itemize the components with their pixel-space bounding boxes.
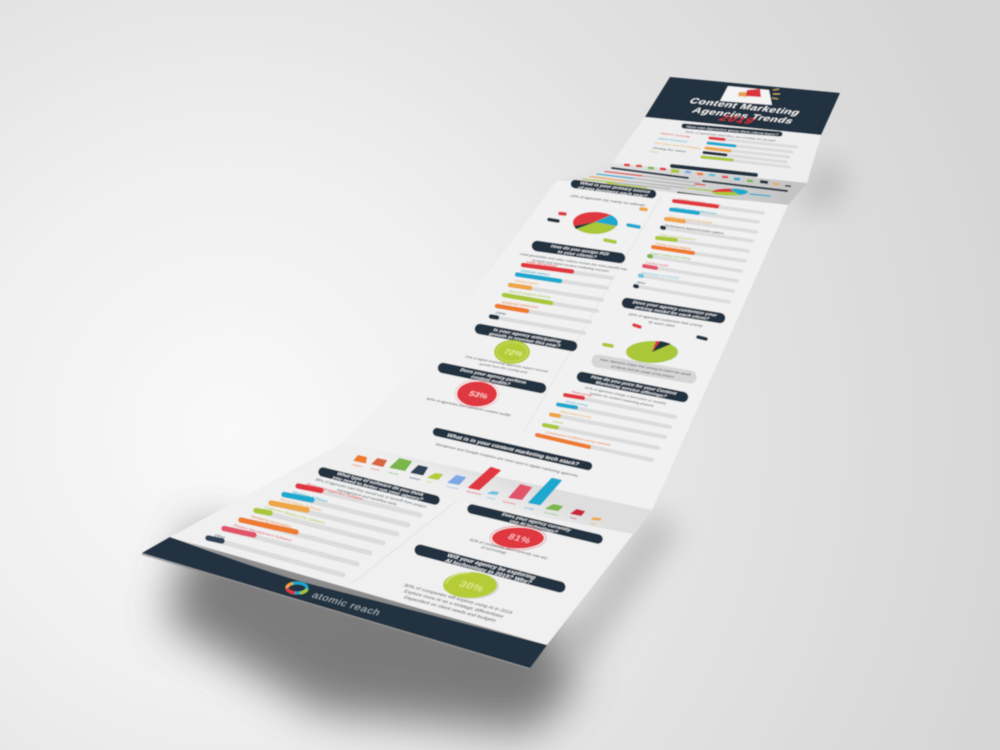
bar chart: Paid social and web display (667, 215, 714, 224)
panel: AI exploring (402, 550, 560, 623)
caption: 30% of companies will explore using AI in 2019 (402, 583, 514, 616)
bar labels: Marketo (408, 476, 422, 481)
bar chart: Finding the Talent (651, 147, 687, 153)
panel: bottom section (170, 443, 652, 645)
bar labels: Semrush (445, 485, 460, 490)
heading pill: Does your agency currently (500, 512, 572, 533)
bar chart: Social reach (513, 279, 539, 286)
panel: right column services chart (635, 198, 763, 302)
panel: tech stack (350, 432, 602, 526)
bar labels: Trello (568, 516, 578, 520)
panel: anticipating growth (464, 328, 572, 374)
panel: pie chart question (549, 181, 652, 242)
bar chart: Cost (648, 150, 659, 154)
pie labels (604, 325, 706, 346)
panel: price for services (537, 375, 683, 460)
caption: 43% of agencies rely mainly on referrals (569, 194, 647, 207)
divider (523, 195, 662, 433)
panel: main middle section (343, 180, 788, 510)
panel: content audits (425, 368, 541, 417)
caption: 84% of agencies don't perform content audits (425, 397, 512, 417)
panel: squeezed fold section (557, 163, 807, 205)
bar chart (491, 260, 612, 333)
heading pill: How can Agencies grow their client base? (685, 125, 780, 136)
bar chart: Combination of different pricing methods (544, 431, 611, 447)
bar chart: Video and infographics (658, 233, 697, 241)
bar chart: Expert writing and editing (649, 252, 692, 260)
bar chart: Client Retention (656, 137, 688, 143)
caption: management and workflow tools (335, 488, 398, 506)
bar chart: Other (635, 281, 648, 285)
caption: 72% of digital marketing agencies expect revenue (464, 355, 549, 373)
caption: Explore more AI as a strategic differentiator (402, 589, 505, 619)
bar chart: What's currently (659, 132, 692, 138)
caption: Wordpress and Google Analytics are most used in digital marketing agencies (434, 442, 580, 478)
caption: for each client (647, 320, 677, 328)
bar chart: Website visitors (519, 269, 552, 277)
bar chart: Hourly pricing (564, 400, 589, 407)
bar chart: Other (213, 533, 228, 540)
bar chart: Marketing Automation (249, 514, 294, 529)
heading pill (480, 328, 572, 349)
bar labels: Google (523, 506, 536, 511)
panel: footer (142, 537, 547, 669)
pie chart (573, 212, 618, 234)
heading pill (672, 166, 756, 175)
caption: 81% of companies don't currently use any (469, 538, 550, 560)
note pill: of clients and the scope of the project (610, 365, 675, 379)
heading pill (420, 550, 560, 587)
bar labels: Other (588, 522, 598, 526)
heading pill: you need to better run your agency? (331, 475, 424, 502)
heading pill: content audits? (469, 375, 511, 387)
stat circle 30%: 30% (456, 579, 487, 594)
icon: laptop and megaphone (720, 86, 780, 105)
heading pill: Does your agency perform (458, 368, 528, 385)
bar labels: Buzzsumo (543, 511, 560, 517)
heading pill: How do you price for your Content (589, 375, 678, 396)
caption: Dependent on client needs and budgets (402, 595, 498, 623)
bar chart: Project Management Software (305, 482, 365, 501)
heading pill: Marketing service offerings? (594, 381, 668, 399)
bar chart: Lead generation (525, 260, 559, 268)
bar chart: Revenue and Profitability (653, 142, 702, 150)
heading pill (537, 244, 620, 260)
stat circle 72%: 72% (502, 347, 526, 358)
sheet shadow (165, 160, 850, 732)
heading pill: use AI technology? (508, 519, 559, 535)
caption: Lead generation and sales metrics remain the most popular way (519, 252, 629, 271)
bar chart: Pricing and packaging (654, 242, 692, 250)
heading pill: How do you assign ROI (549, 244, 611, 257)
caption: to track and report content marketing success (531, 259, 610, 273)
bar chart: Product Management Software (232, 523, 294, 542)
panel: pricing model question (598, 300, 720, 379)
bar labels: Ahrefs (485, 496, 497, 501)
heading pill: What is in your content marketing tech stack? (445, 433, 580, 467)
folded infographic sheet (142, 77, 840, 669)
heading pill: What is your primary source (578, 181, 652, 195)
heading pill (443, 368, 541, 388)
heading pill: of new business each year? (576, 186, 649, 199)
header banner (645, 77, 840, 135)
heading pill (472, 509, 598, 539)
squeezed pie (712, 188, 748, 196)
title: Content Marketing (687, 97, 803, 117)
pie chart (626, 341, 678, 363)
title: Agencies Trends (689, 106, 796, 126)
bar chart (354, 456, 602, 520)
caption: AI technology (480, 545, 509, 555)
caption: 38% of agencies said they would use or benefit from project (314, 477, 429, 509)
bar chart: Content marketing strategy (676, 198, 722, 207)
bar chart: Hybrid (551, 420, 564, 425)
panel: ROI question (491, 244, 629, 333)
caption: growth from the coming year (478, 362, 529, 374)
stat circle 30% (443, 572, 499, 599)
bar chart: Content audits (644, 261, 670, 268)
bar labels: Hubspot (350, 463, 364, 468)
bar labels (350, 463, 598, 526)
heading pill: pricing model for each client? (633, 305, 710, 321)
bar chart (635, 198, 763, 302)
bar labels: WordPress (465, 490, 483, 496)
heading pill: growth in revenue this year? (487, 332, 561, 349)
bar chart: Value-based pricing (558, 410, 592, 419)
intro text: 84% of agencies said they are looking for growth (684, 131, 777, 142)
brand name: atomic reach (309, 591, 383, 618)
caption: retainer for content marketing projects (589, 392, 655, 408)
squeezed chart tiles (624, 165, 791, 186)
caption: 85% of agencies customize their pricing (628, 312, 704, 328)
bar labels: Drupal (369, 467, 381, 472)
bar chart: Performance-based incentive options (663, 224, 725, 235)
divider (353, 502, 455, 583)
squeezed rows (576, 168, 787, 205)
title: 2019 (716, 113, 758, 126)
bar labels: Shopify (387, 471, 400, 476)
pie labels (549, 209, 646, 242)
panel: AI usage (469, 509, 598, 560)
stat circle 53%: 53% (467, 389, 491, 400)
bar labels: Moz (425, 480, 434, 484)
note pill: Note: Agencies shape their pricing to match the needs (599, 358, 692, 376)
heading pill: to your clients? (556, 250, 598, 260)
bar chart (208, 482, 420, 575)
bar chart: Workflow Software (291, 490, 330, 503)
heading pill: Will your agency be exploring (445, 553, 538, 581)
bar chart: Assigned attribution (500, 300, 540, 309)
bar chart: Workshops and training (640, 271, 680, 280)
stat circle 81%: 81% (505, 532, 533, 546)
heading pill: What type of software do you think (335, 472, 425, 498)
bar chart: Search engine optimization (672, 206, 718, 215)
icon: logo ring (287, 583, 307, 593)
bar chart: Other (494, 311, 508, 316)
panel: top section (612, 77, 840, 183)
heading pill: AI technology in 2019? Why? (443, 558, 534, 586)
bar chart (537, 390, 675, 460)
bar chart: Fixed pricing (570, 390, 593, 397)
bar chart: Customer Relationship Software (263, 505, 327, 525)
caption: 61% of agencies charge a fixed price or monthly (584, 386, 667, 405)
bar labels: Mailchimp (501, 500, 517, 506)
bar chart (648, 132, 796, 167)
bar chart: Search engine ranking (507, 289, 552, 299)
heading pill: Is your agency anticipating (492, 328, 562, 344)
heading pill: Does your agency customize your (631, 300, 718, 318)
panel: software question (208, 472, 435, 575)
bar chart: Social Media Software (278, 497, 324, 512)
